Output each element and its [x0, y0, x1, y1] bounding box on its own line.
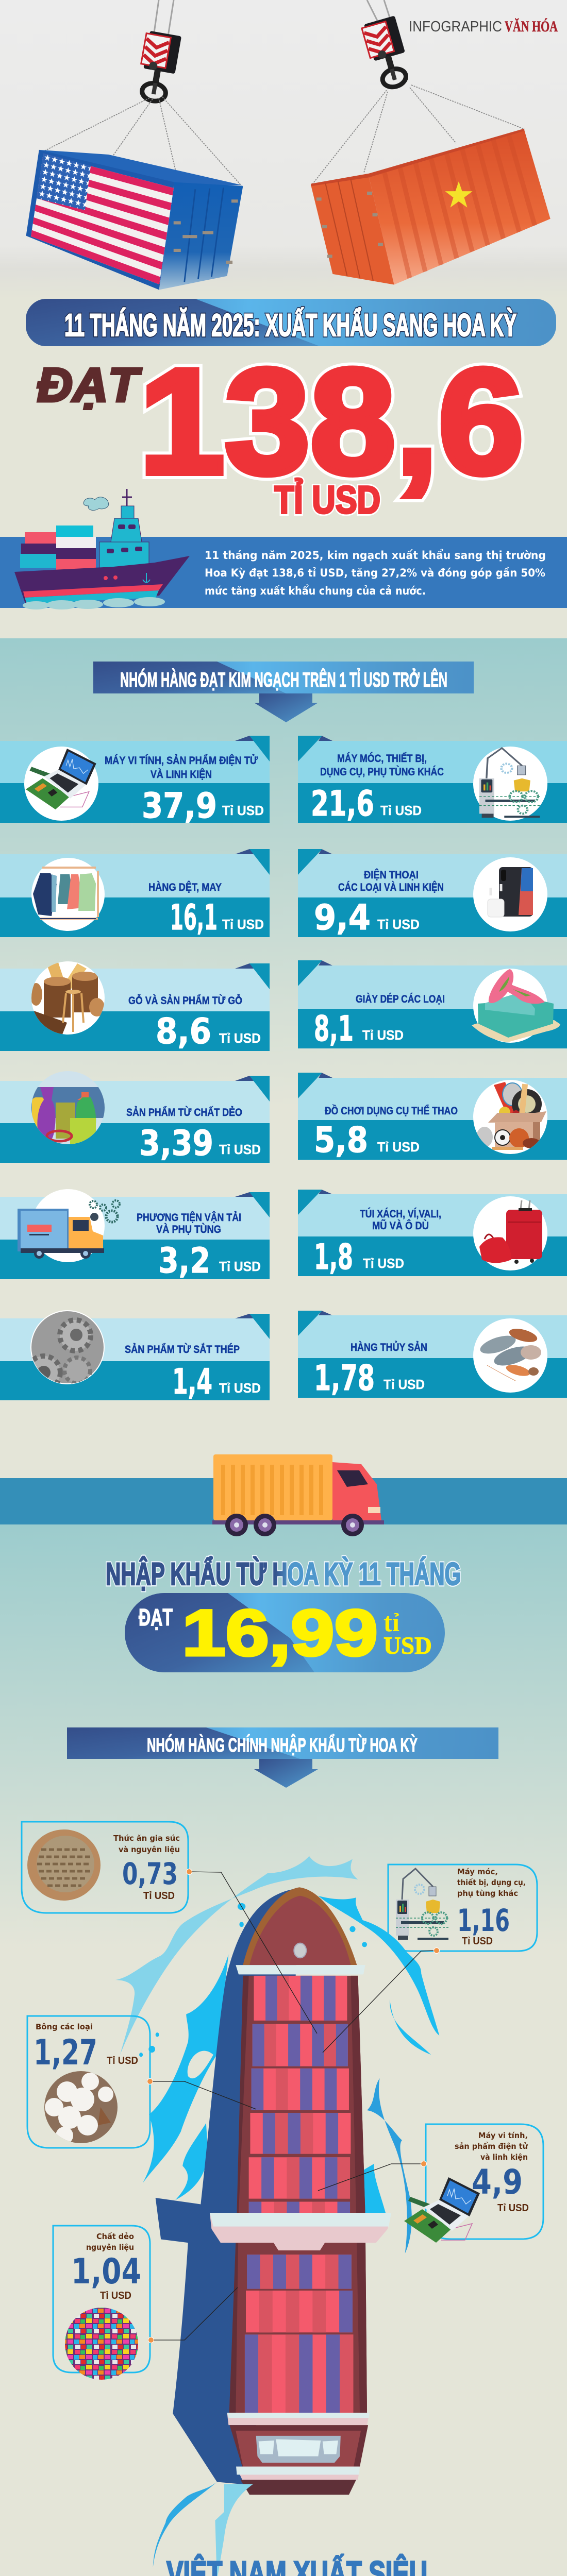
icon: animal feed bowl — [27, 1829, 101, 1901]
callout: thức ăn gia súc — [22, 1822, 188, 1913]
logo top: INFOGRAPHIC — [409, 19, 502, 35]
card: máy vi tính: 37,9 — [142, 786, 217, 826]
card: sắt thép: SẢN PHẨM TỪ SẮT THÉP — [125, 1343, 240, 1355]
card: hàng dệt may — [0, 849, 270, 938]
unit: tỉ USD: TỈ USD — [274, 478, 380, 521]
card: phương tiện vận tải: Tỉ USD — [219, 1259, 261, 1274]
card: máy móc — [298, 736, 567, 824]
card: giày dép: GIÀY DÉP CÁC LOẠI — [356, 993, 445, 1005]
card: máy vi tính: MÁY VI TÍNH, SẢN PHẨM ĐIỆN TỬ — [105, 754, 258, 767]
icon: delivery truck — [18, 1189, 120, 1262]
callout: máy móc: thiết bị, dụng cụ, — [457, 1877, 526, 1887]
card: chất dẻo: SẢN PHẨM TỪ CHẤT DẺO — [126, 1106, 242, 1118]
title banner — [26, 299, 556, 346]
icon: shoes on box — [472, 969, 560, 1043]
card: giày dép: Tỉ USD — [362, 1027, 404, 1043]
card: gỗ: GỖ VÀ SẢN PHẨM TỪ GỖ — [128, 994, 242, 1007]
card: giày dép: 8,1 — [314, 1009, 354, 1049]
card: thủy sản: HÀNG THỦY SẢN — [351, 1341, 427, 1353]
icon: wood logs — [30, 961, 105, 1036]
callout: bông: Bông các loại — [36, 2022, 93, 2031]
icon: plastic beads — [65, 2308, 138, 2380]
card: chất dẻo: 3,39 — [139, 1123, 213, 1164]
card: máy móc: MÁY MÓC, THIẾT BỊ, — [337, 752, 427, 765]
callout: thức ăn gia súc: và nguyên liệu — [119, 1845, 180, 1854]
card: túi xách: 1,8 — [314, 1237, 353, 1278]
callout: máy vi tính: 4,9 — [472, 2162, 523, 2202]
callout: bông: 1,27 — [34, 2032, 97, 2073]
pill: nhập khẩu 16,99: USD — [383, 1632, 432, 1659]
card: máy móc: DỤNG CỤ, PHỤ TÙNG KHÁC — [320, 766, 444, 778]
icon: laptop — [24, 747, 98, 821]
section banner: nhóm hàng trên 1 tỉ USD — [93, 662, 474, 722]
summary band: mức tăng xuất khẩu chung của cả nước. — [205, 584, 426, 597]
card: gỗ: Tỉ USD — [219, 1030, 261, 1046]
card: thủy sản: 1,78 — [314, 1358, 375, 1399]
card: hàng dệt may: Tỉ USD — [222, 917, 264, 932]
icon: smartphone and earbuds — [473, 857, 547, 931]
card: máy vi tính — [0, 736, 270, 826]
card: điện thoại — [298, 849, 567, 938]
callout: bông: Tỉ USD — [107, 2055, 138, 2066]
card: máy vi tính: Tỉ USD — [222, 803, 264, 818]
icon: machinery — [473, 747, 547, 821]
callout: chất dẻo: nguyên liệu — [86, 2243, 134, 2252]
unit: tỉ USD: TỈ USD — [274, 478, 380, 521]
card: điện thoại: ĐIỆN THOẠI — [364, 869, 419, 881]
heading: đạt: ĐẠT — [37, 358, 142, 412]
callout: máy vi tính: Máy vi tính, — [478, 2131, 528, 2140]
pill: nhập khẩu 16,99 — [125, 1593, 445, 1672]
callout: máy vi tính: Tỉ USD — [497, 2202, 529, 2214]
card: thủy sản — [298, 1311, 567, 1399]
icon: plastic products — [31, 1071, 105, 1144]
card: phương tiện vận tải: PHƯƠNG TIỆN VẬN TẢI — [137, 1211, 241, 1224]
icon: cargo ship — [14, 489, 190, 609]
card: chất dẻo — [0, 1071, 270, 1164]
card: hàng dệt may: 16,1 — [170, 897, 218, 938]
big number: 138,6: 138,6 — [139, 338, 524, 505]
pill: nhập khẩu 16,99: 16,99 — [182, 1596, 378, 1669]
leader lines and dots — [147, 1869, 439, 2343]
icon: clothes rack — [31, 858, 105, 931]
callout: máy móc: 1,16 — [457, 1903, 510, 1939]
icon: steel gears — [27, 1310, 105, 1389]
card: sắt thép — [0, 1310, 270, 1402]
card: sắt thép: Tỉ USD — [219, 1380, 261, 1396]
card: túi xách: Tỉ USD — [363, 1256, 404, 1271]
callout: bông — [27, 2016, 150, 2148]
card: đồ chơi: ĐỒ CHƠI DỤNG CỤ THỂ THAO — [325, 1105, 458, 1117]
card: phương tiện vận tải: 3,2 — [158, 1241, 210, 1281]
pill: nhập khẩu 16,99: tỉ — [383, 1608, 399, 1637]
callout: máy vi tính — [404, 2124, 543, 2243]
card: điện thoại: CÁC LOẠI VÀ LINH KIỆN — [338, 881, 444, 893]
container: US flag — [26, 150, 243, 290]
card: thủy sản: Tỉ USD — [383, 1377, 425, 1392]
card: túi xách: MŨ VÀ Ô DÙ — [372, 1219, 429, 1232]
card: túi xách — [298, 1190, 567, 1278]
icon: seafood — [473, 1318, 547, 1393]
summary band: 11 tháng năm 2025, kim ngạch xuất khẩu sang thị trường — [205, 549, 546, 562]
pill: nhập khẩu 16,99: ĐẠT — [139, 1604, 173, 1631]
logo top — [409, 18, 558, 35]
callout: máy móc: phụ tùng khác — [457, 1889, 518, 1898]
summary band: Hoa Kỳ đạt 138,6 tỉ USD, tăng 27,2% và đóng góp gần 50% — [205, 567, 545, 579]
callout: máy móc: Máy móc, — [457, 1867, 498, 1876]
icon: cotton — [44, 2071, 118, 2144]
callout: thức ăn gia súc: Thức ăn gia súc — [113, 1834, 180, 1843]
card: đồ chơi — [298, 1073, 567, 1161]
card: gỗ — [0, 961, 270, 1052]
card: phương tiện vận tải — [0, 1189, 270, 1281]
callout: máy móc: Tỉ USD — [462, 1936, 493, 1947]
section banner: nhóm hàng nhập khẩu — [67, 1727, 498, 1788]
card: điện thoại: 9,4 — [314, 897, 371, 938]
callout: chất dẻo — [53, 2226, 150, 2380]
card: giày dép — [298, 960, 567, 1049]
callout: thức ăn gia súc: Tỉ USD — [143, 1890, 175, 1902]
card: hàng dệt may: HÀNG DỆT, MAY — [148, 881, 222, 893]
illustration: container ship top view with splash — [115, 1856, 439, 2576]
card: gỗ: 8,6 — [156, 1011, 211, 1052]
card: chất dẻo: Tỉ USD — [219, 1142, 261, 1157]
callout: chất dẻo: Chất dẻo — [96, 2232, 134, 2241]
big number: 138,6: 138,6 — [139, 338, 524, 505]
callout: chất dẻo: 1,04 — [71, 2251, 141, 2292]
callout: chất dẻo: Tỉ USD — [100, 2290, 131, 2301]
icon: laptop — [404, 2177, 480, 2243]
card: túi xách: TÚI XÁCH, VÍ,VALI, — [360, 1208, 441, 1220]
blue band behind truck — [0, 1478, 567, 1524]
card: phương tiện vận tải: VÀ PHỤ TÙNG — [156, 1223, 221, 1235]
icon: suitcase and bag — [473, 1196, 547, 1270]
icon: machinery — [396, 1869, 448, 1940]
icon: crane hook right — [311, 0, 524, 185]
section banner: nhóm hàng nhập khẩu: NHÓM HÀNG CHÍNH NHẬP KHẨU TỪ HOA KỲ — [147, 1733, 418, 1756]
card: máy móc: Tỉ USD — [380, 803, 422, 818]
icon: orange container truck — [212, 1454, 384, 1536]
container: Vietnam flag — [311, 128, 551, 285]
card: điện thoại: Tỉ USD — [377, 917, 420, 932]
card: máy vi tính: VÀ LINH KIỆN — [151, 768, 212, 781]
card: máy móc: 21,6 — [311, 784, 374, 824]
callout: máy vi tính: sản phẩm điện tử — [455, 2141, 528, 2151]
callout: máy vi tính: và linh kiện — [480, 2153, 528, 2162]
card: đồ chơi: 5,8 — [314, 1120, 368, 1161]
callout: thức ăn gia súc: 0,73 — [122, 1856, 178, 1891]
icon: toys and sports — [473, 1080, 547, 1154]
card: đồ chơi: Tỉ USD — [377, 1139, 420, 1155]
summary band — [0, 537, 567, 608]
icon: crane hook left — [41, 0, 241, 185]
card: sắt thép: 1,4 — [172, 1362, 212, 1402]
callout: máy móc — [388, 1865, 537, 1951]
